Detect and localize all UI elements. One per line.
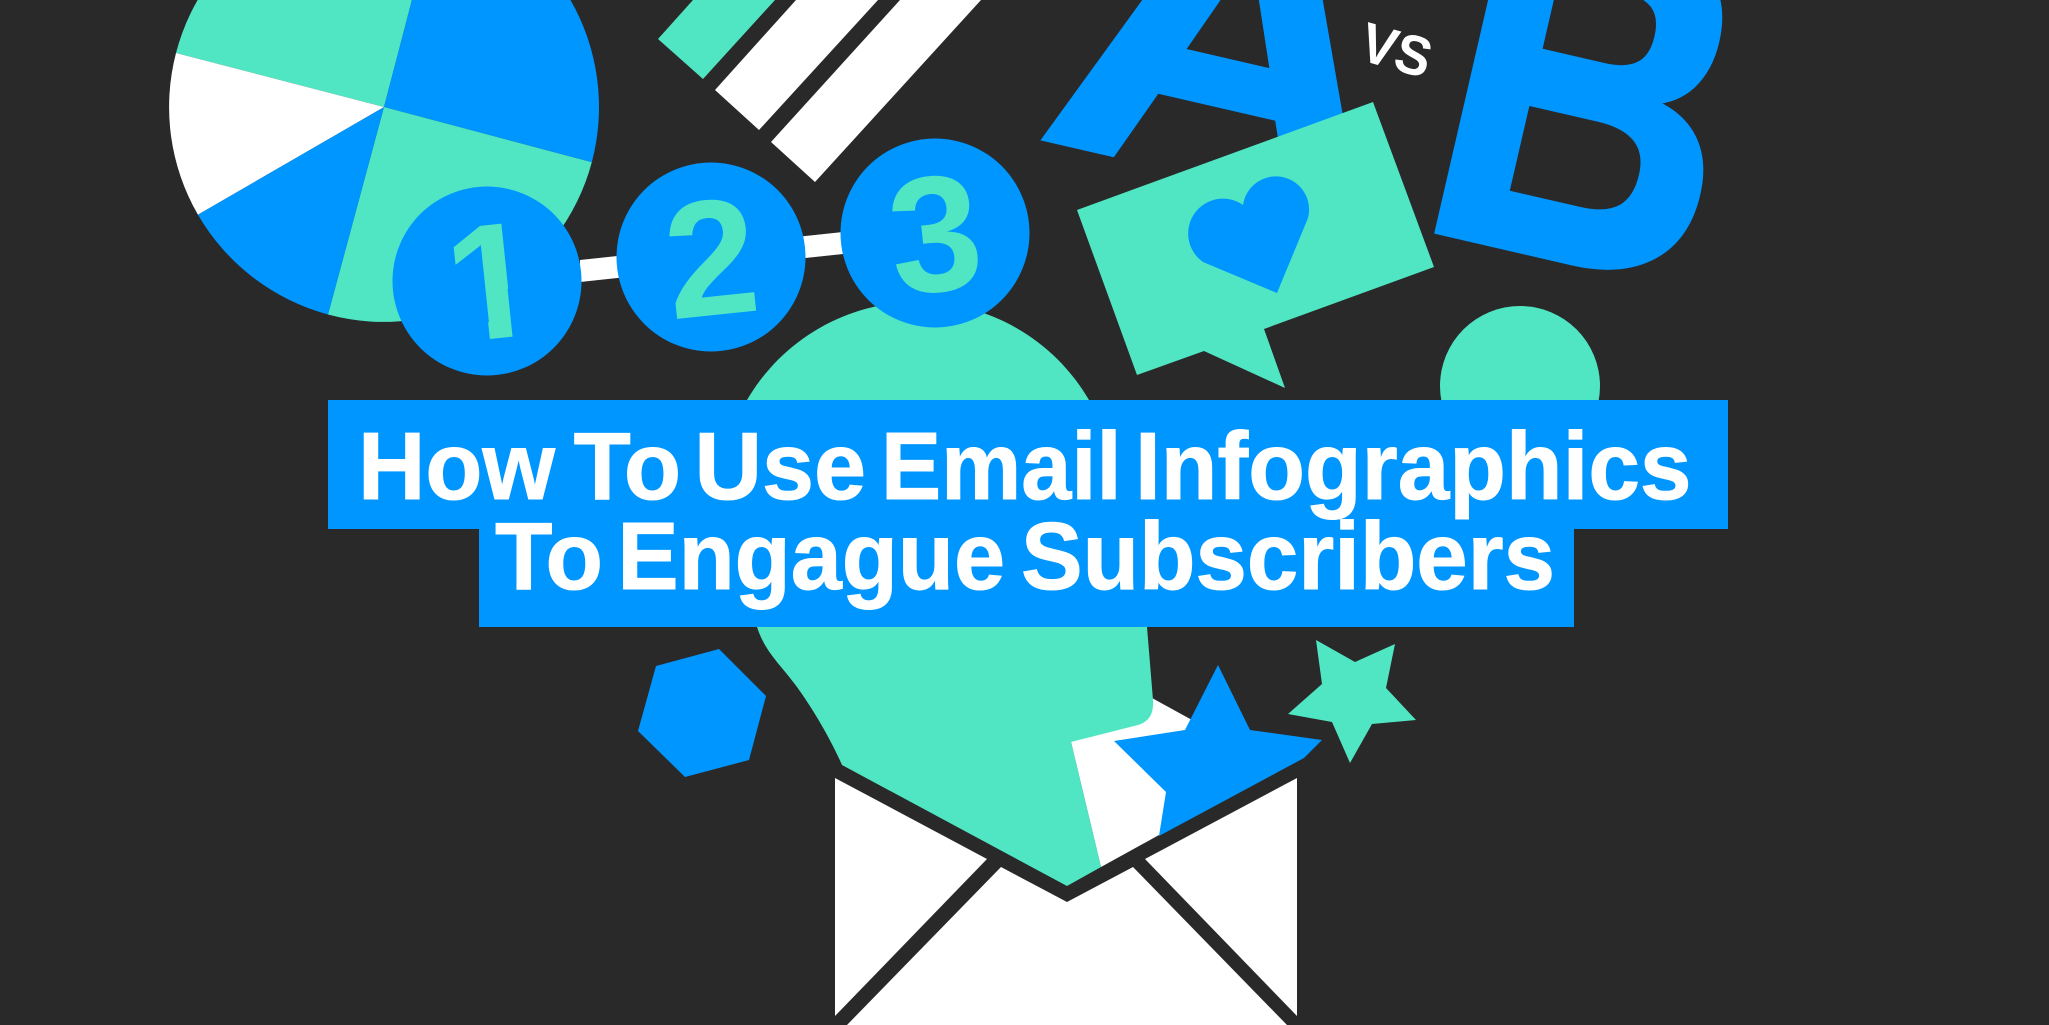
title line 1: Email bbox=[881, 413, 1122, 520]
vs label: VS bbox=[1354, 10, 1439, 90]
diagonal stripes bbox=[658, 0, 981, 182]
title line 1 bbox=[358, 413, 1692, 520]
title line 1: Infographics bbox=[1135, 413, 1692, 520]
title banner bbox=[328, 400, 1728, 627]
blue star bbox=[1114, 665, 1322, 836]
title line 1: Use bbox=[694, 413, 866, 520]
green balloon bbox=[747, 302, 1153, 886]
green star bbox=[1288, 640, 1416, 763]
circle 1: 1 bbox=[437, 185, 547, 378]
circle 3 bbox=[840, 138, 1030, 330]
title line 2: To bbox=[495, 503, 603, 610]
icon: heart bbox=[1188, 176, 1309, 293]
circle 3: 3 bbox=[880, 138, 990, 330]
title line 2: Engague bbox=[617, 503, 1005, 610]
speech bubble bbox=[1077, 102, 1434, 388]
title line 1: To bbox=[574, 413, 681, 520]
title line 2 bbox=[495, 503, 1555, 610]
hexagon bbox=[638, 649, 766, 777]
white card behind balloon bbox=[1071, 698, 1192, 867]
title line 1: How bbox=[358, 413, 555, 520]
envelope bbox=[835, 778, 1297, 1025]
green circle bbox=[1440, 306, 1600, 466]
circle 1 bbox=[392, 185, 582, 378]
pie chart bbox=[169, 0, 599, 322]
title line 2: Subscribers bbox=[1021, 503, 1555, 610]
connector line bbox=[580, 232, 843, 282]
numbered circles bbox=[392, 138, 1030, 378]
circle 2 bbox=[616, 162, 806, 354]
circle 2: 2 bbox=[656, 162, 766, 354]
